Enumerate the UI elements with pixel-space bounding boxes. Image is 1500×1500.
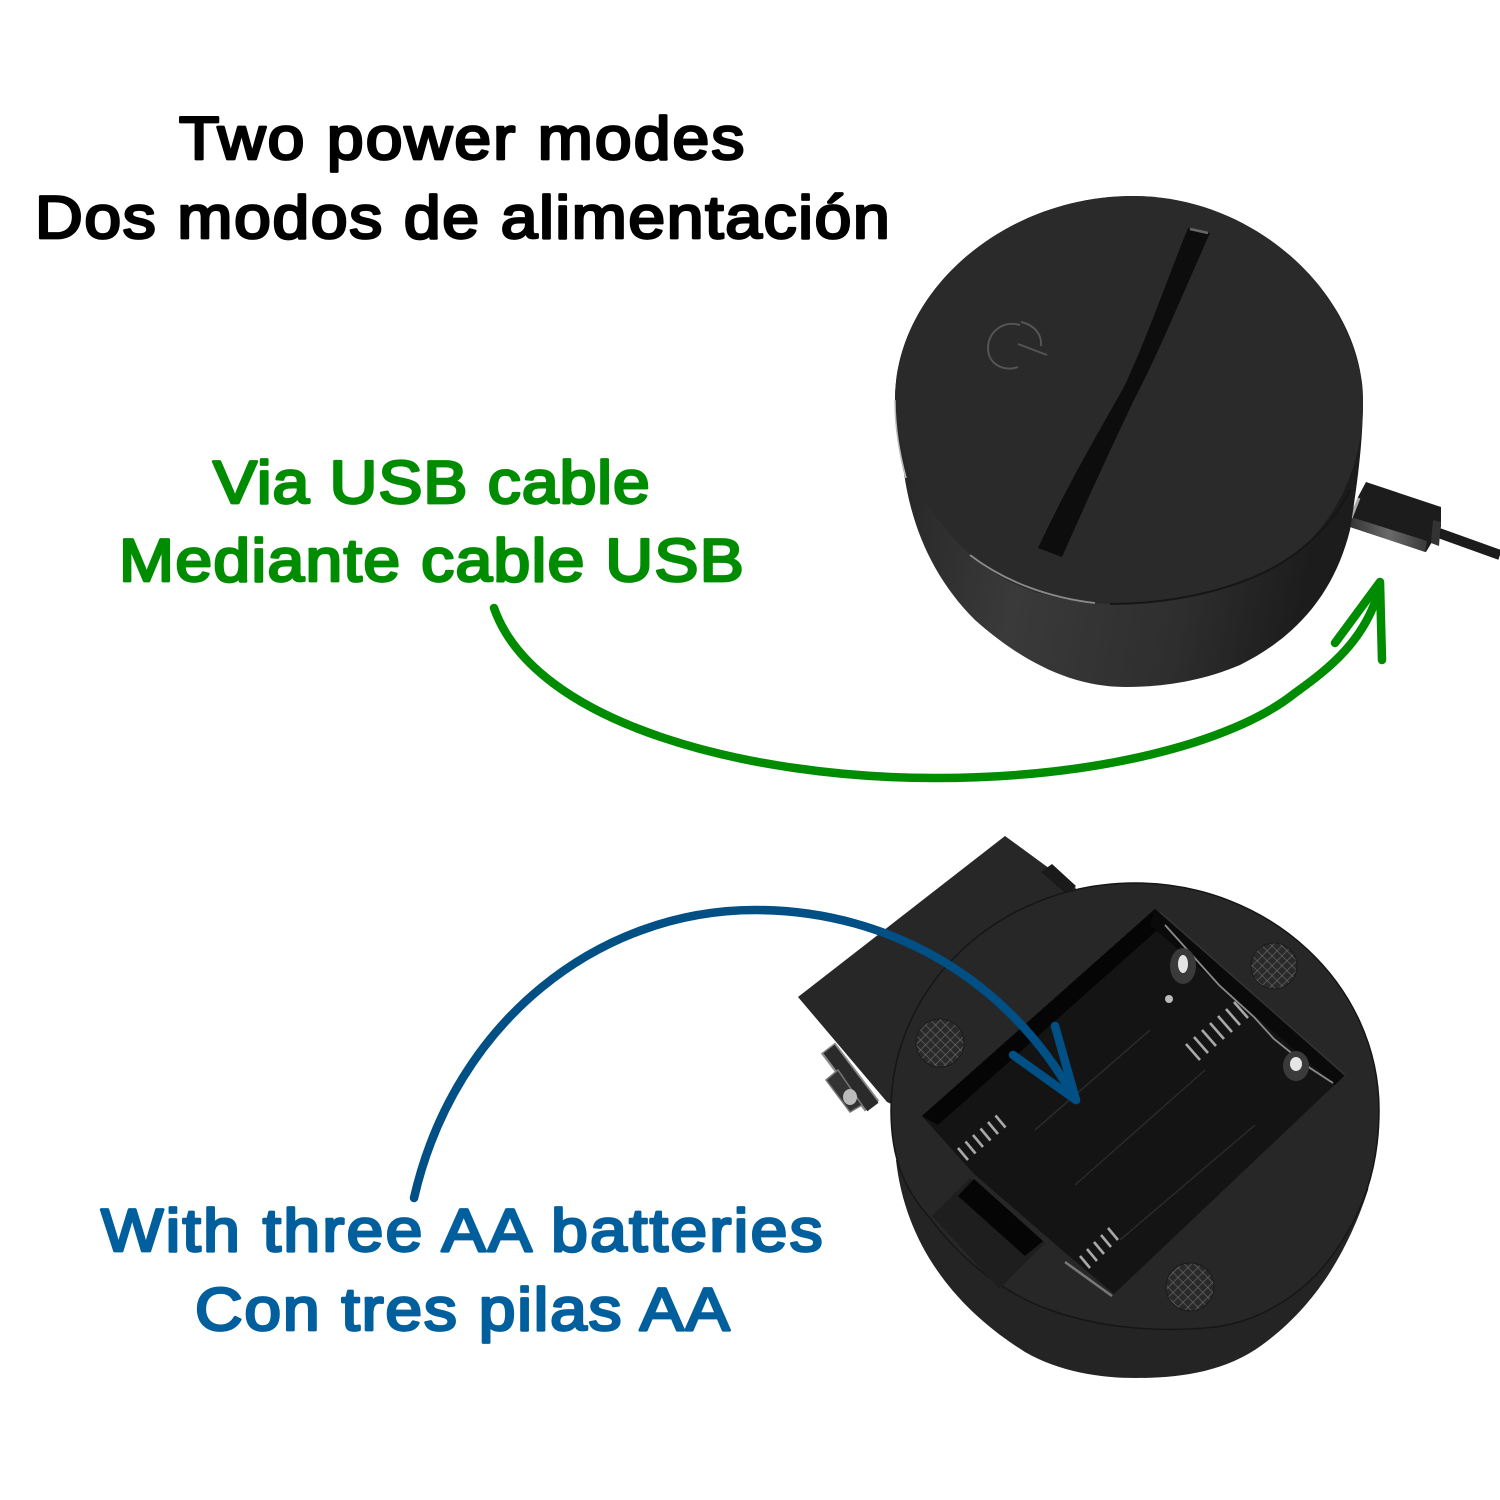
photo: lamp base underside with battery compartment xyxy=(798,836,1379,1378)
label: via USB cable: Mediante cable USB xyxy=(119,528,744,594)
contact rail xyxy=(1165,925,1333,1083)
title: Dos modos de alimentación xyxy=(35,185,890,251)
green arrow xyxy=(494,582,1382,778)
icon: power symbol xyxy=(988,322,1047,369)
black strip xyxy=(958,1179,1043,1256)
battery slot outlines xyxy=(1035,1030,1255,1240)
label: via USB cable xyxy=(119,450,744,594)
underside face xyxy=(891,883,1379,1329)
contact: upper xyxy=(1165,948,1309,1081)
title xyxy=(35,106,890,251)
blue arrow xyxy=(414,910,1076,1198)
base body xyxy=(896,1110,1379,1378)
photo: lamp base with USB cable xyxy=(895,196,1500,687)
title: Two power modes xyxy=(179,106,744,172)
edge highlight xyxy=(970,555,1095,603)
base body xyxy=(895,196,1363,687)
label: three AA batteries: With three AA batteries xyxy=(101,1198,823,1264)
battery door flap xyxy=(798,836,1076,1110)
label: three AA batteries xyxy=(101,1198,823,1343)
top face xyxy=(895,196,1363,604)
cover notch xyxy=(932,1178,1045,1289)
metal clip xyxy=(826,1048,873,1112)
battery compartment xyxy=(922,909,1345,1296)
USB cable and connector xyxy=(1350,482,1500,555)
slot xyxy=(1038,228,1210,557)
rubber foot pads xyxy=(916,943,1297,1311)
springs xyxy=(958,1002,1248,1296)
label: via USB cable: Via USB cable xyxy=(213,450,650,516)
label: three AA batteries: Con tres pilas AA xyxy=(195,1277,730,1343)
